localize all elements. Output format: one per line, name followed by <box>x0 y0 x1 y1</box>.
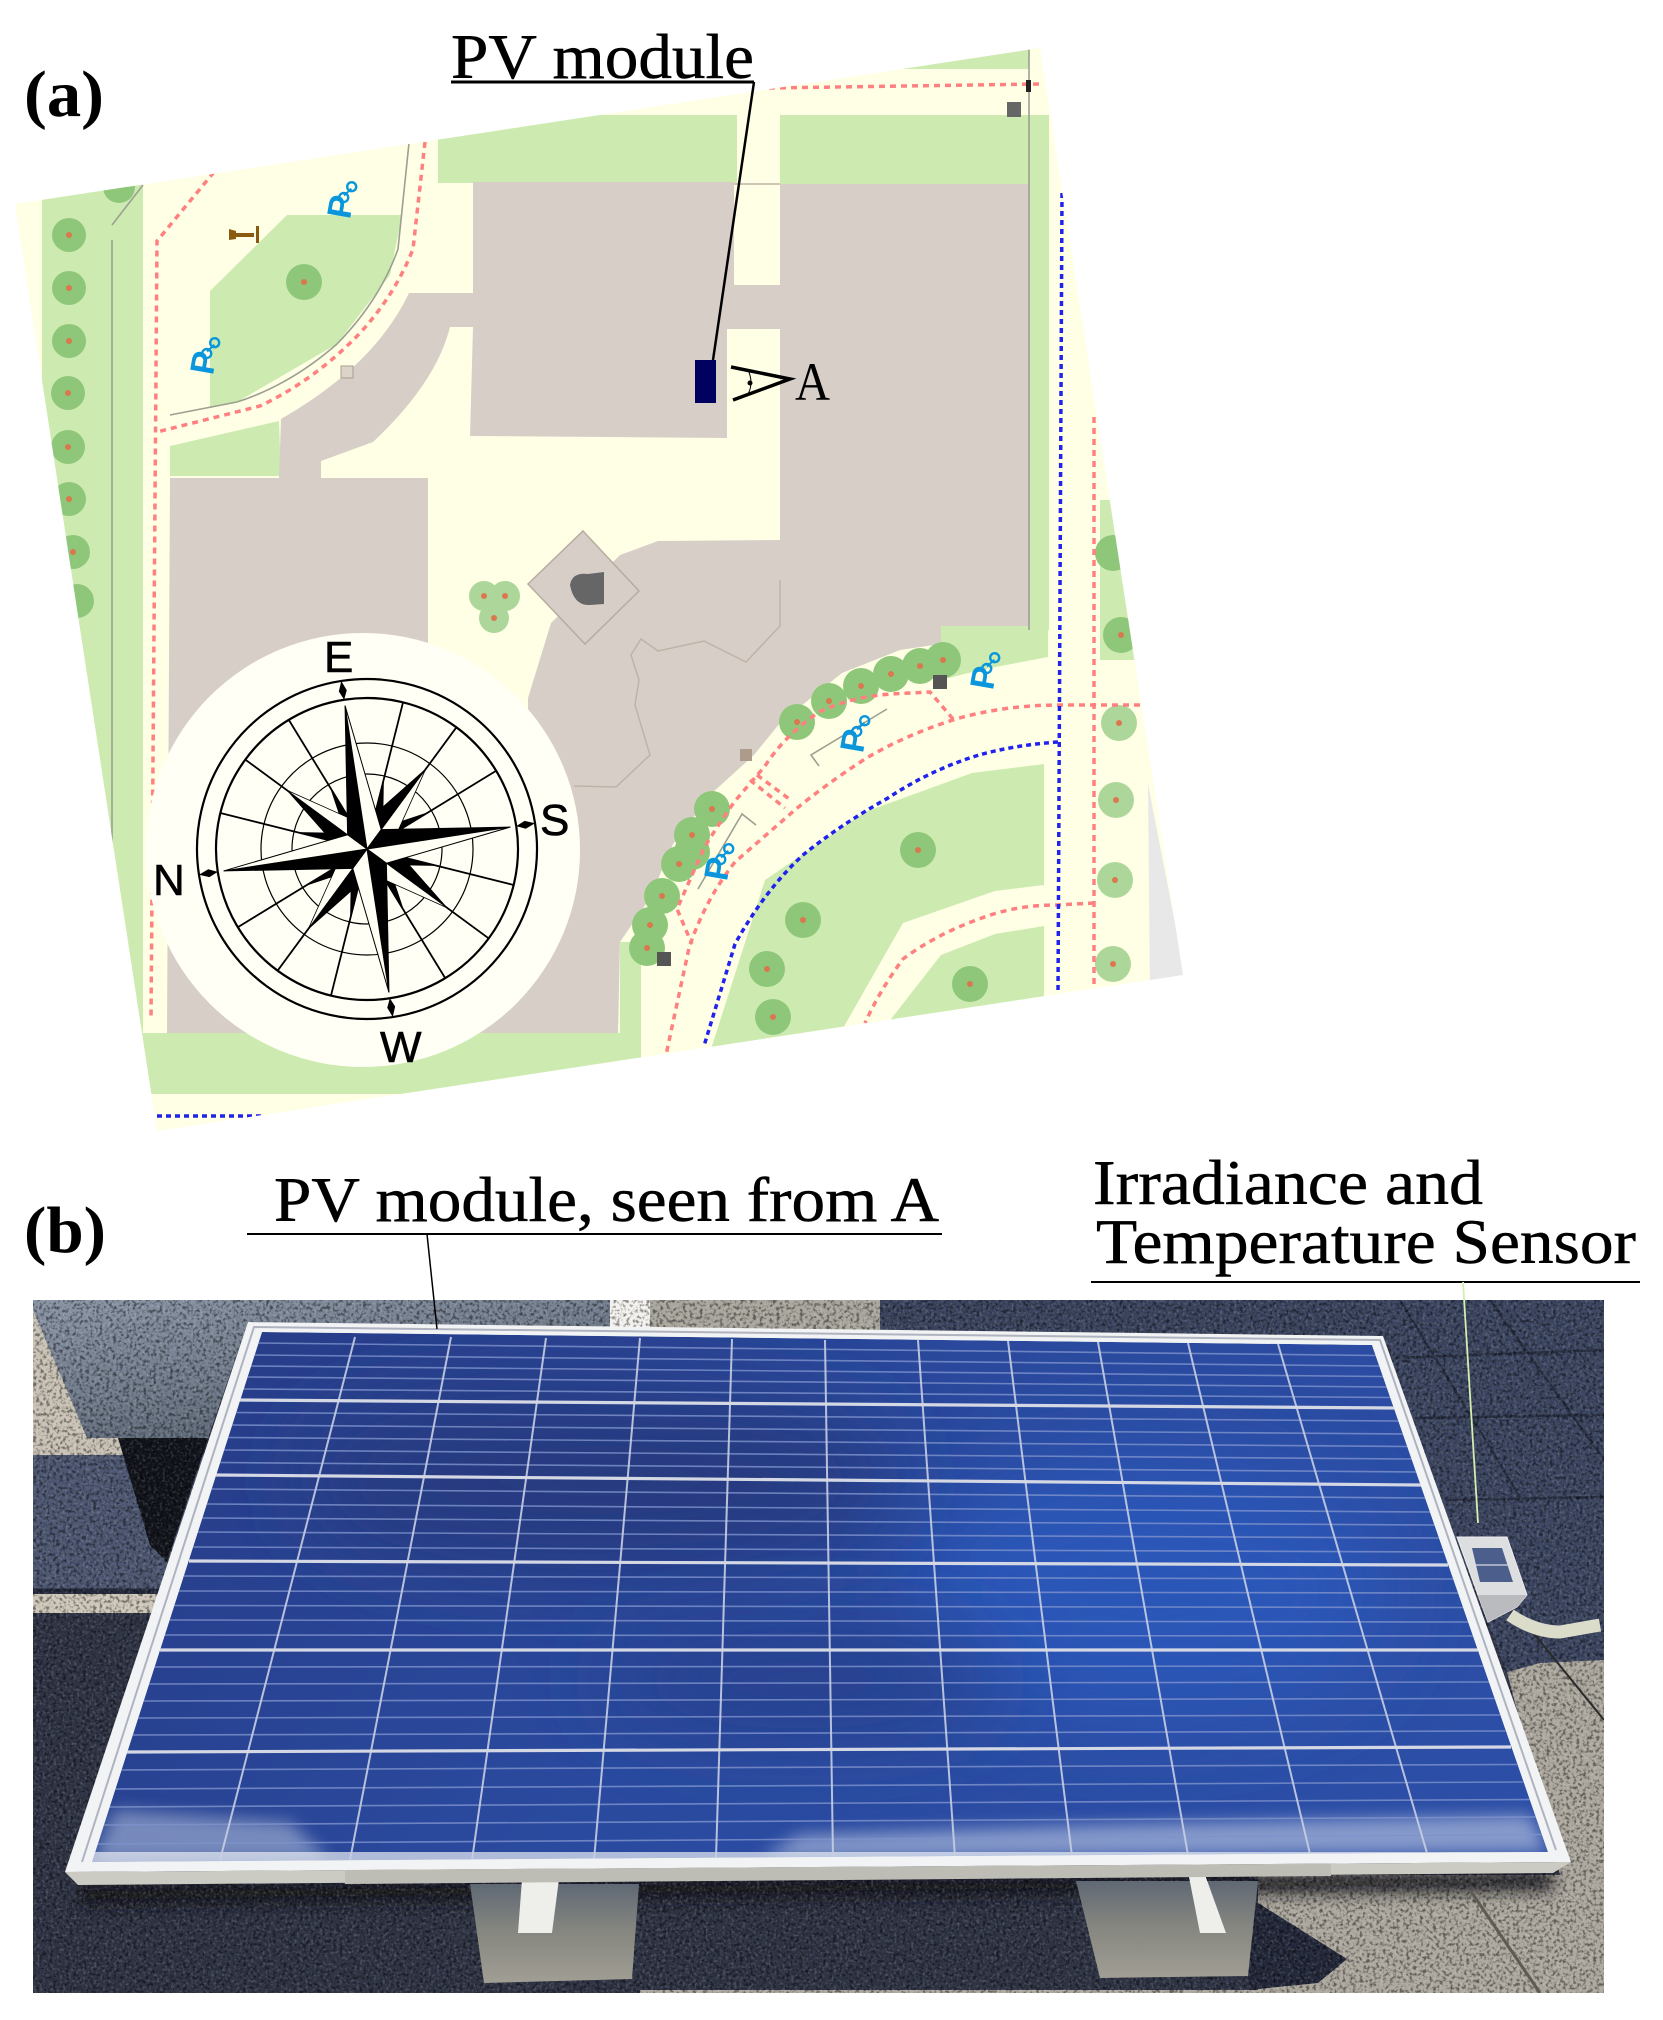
solar cells <box>90 1332 1550 1864</box>
compass letters <box>153 633 569 1072</box>
main points <box>202 684 532 1014</box>
compass letters: E <box>324 633 353 682</box>
label: (b): (b) <box>24 1194 106 1267</box>
shadow under module <box>78 1872 1553 1905</box>
panel: photo of PV module on roof <box>33 1300 1604 1994</box>
white pole and top strip <box>610 1300 650 1327</box>
rooftop outline lines <box>574 184 780 787</box>
bicycle parking symbols: P <box>833 726 875 755</box>
irradiance and temperature sensor <box>1457 1537 1600 1632</box>
callout: PV module seen from A <box>247 1165 942 1329</box>
bicycle parking symbols: P <box>963 663 1005 692</box>
foot brackets <box>518 1879 559 1933</box>
viewpoint A eye symbol <box>731 352 830 412</box>
bicycle parking symbols <box>183 178 1007 883</box>
ring diamonds <box>173 655 561 1043</box>
panel: site map <box>15 48 1183 1131</box>
concrete foot blocks <box>470 1884 639 1983</box>
bicycle parking symbols: P <box>320 192 362 221</box>
module frame <box>65 1322 1571 1872</box>
map symbols <box>229 226 259 243</box>
observatory diamond <box>528 531 639 644</box>
diagonal points <box>287 769 447 929</box>
callout: PV module: PV module <box>451 21 754 92</box>
viewpoint A eye symbol: A <box>795 352 830 412</box>
compass letters: N <box>153 856 185 905</box>
compass rose <box>146 633 580 1072</box>
concrete block top-left <box>33 1300 610 1438</box>
callout: irradiance and temperature sensor: Irradiance and <box>1093 1148 1483 1218</box>
cell separators <box>220 1337 1427 1860</box>
bicycle parking symbols: P <box>697 854 739 883</box>
gravel lower right <box>1258 1660 1604 1993</box>
photo grain <box>33 1300 1604 1993</box>
compass letters: S <box>540 796 569 845</box>
label: (a): (a) <box>24 58 104 131</box>
callout: PV module seen from A: PV module, seen from A <box>274 1165 940 1235</box>
grey thin lines <box>111 50 1030 890</box>
green areas <box>42 40 1140 1100</box>
cycleways (blue dashed) <box>157 193 1062 1116</box>
thin busbars <box>98 1343 1542 1844</box>
tertiary spikes <box>293 775 441 923</box>
roof background <box>33 1300 1604 1993</box>
compass letters: W <box>380 1023 422 1072</box>
footways (red dashed) <box>151 84 1140 1055</box>
PV module marker <box>695 360 716 403</box>
buildings <box>167 182 1029 1033</box>
bicycle parking symbols: P <box>183 348 225 377</box>
tile joints <box>1395 1300 1604 1500</box>
trees <box>51 171 1139 1035</box>
callout: irradiance and temperature sensor <box>1091 1148 1640 1523</box>
callout: irradiance and temperature sensor: Temperature Sensor <box>1096 1207 1636 1277</box>
callout: PV module <box>451 21 754 360</box>
